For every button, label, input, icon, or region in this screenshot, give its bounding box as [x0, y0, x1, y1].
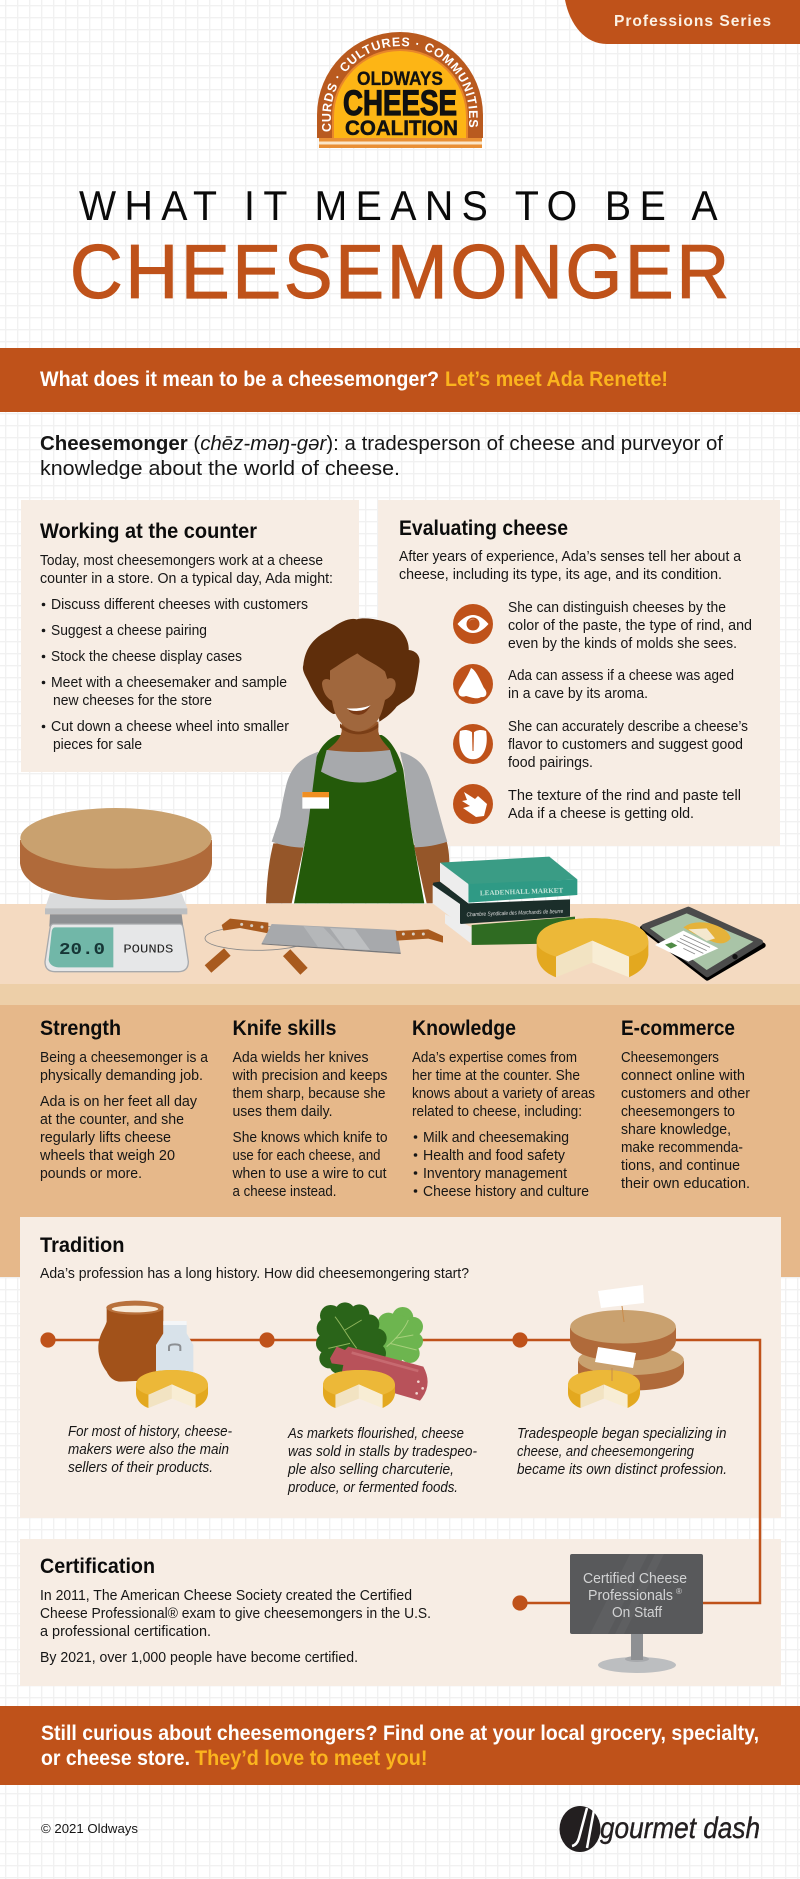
column: e-commerce: cheesemongers to [621, 1104, 735, 1120]
logo: Oldways Cheese Coalition: CURDS · CULTURES · COMMUNITIES [322, 37, 478, 132]
illustration: cut cheese wheel [537, 918, 648, 977]
banner: meet Ada: Let’s meet Ada Renette! [445, 368, 668, 391]
timeline connector [40, 1332, 760, 1611]
panel: working at the counter: Meet with a cheesemaker and sample [51, 675, 287, 691]
sense text: sight: color of the paste, the type of rind, and [508, 618, 752, 634]
panel: evaluating cheese: Evaluating cheese [399, 517, 568, 540]
title [70, 182, 732, 315]
book: green [445, 914, 575, 945]
sense text: taste: She can accurately describe a cheese’s [508, 719, 748, 735]
column: knowledge: Ada’s expertise comes from [412, 1050, 577, 1066]
panel: working at the counter: Working at the counter [40, 520, 257, 543]
caption: history step 2: was sold in stalls by tradespeo- [288, 1444, 477, 1460]
column: strength: regularly lifts cheese [40, 1130, 171, 1146]
column: knife skills: with precision and keeps [232, 1068, 388, 1084]
panel: certification: In 2011, The American Cheese Society created the Certified [40, 1588, 412, 1604]
panel: certification [20, 1539, 781, 1686]
banner: call to action: Still curious about cheesemongers? Find one at your local grocery, specialty, [41, 1722, 759, 1745]
illustration: certified cheese professionals sign: On Staff [612, 1605, 663, 1621]
column: strength: Being a cheesemonger is a [40, 1050, 209, 1066]
column: strength: pounds or more. [40, 1166, 142, 1182]
illustration: greens, salami and cheese [316, 1302, 428, 1408]
panel: evaluating cheese [378, 500, 780, 846]
column: strength: physically demanding job. [40, 1068, 203, 1084]
column: knife skills: a cheese instead. [232, 1184, 336, 1200]
logo: gourmet dash: gourmet dash [600, 1812, 760, 1845]
caption: history step 2 [287, 1426, 477, 1496]
column: knife skills: use for each cheese, and [232, 1148, 380, 1164]
sense text: sight: She can distinguish cheeses by the [508, 600, 726, 616]
definition [40, 433, 723, 480]
illustration: scale with cheese wheel [20, 808, 212, 972]
column: knowledge: related to cheese, including: [412, 1104, 582, 1120]
column: knife skills: when to use a wire to cut [232, 1166, 386, 1182]
caption: history step 3 [517, 1426, 727, 1478]
column: e-commerce: tions, and continue [621, 1158, 740, 1174]
column: knowledge: her time at the counter. She [412, 1068, 580, 1084]
column: knowledge: Cheese history and culture [423, 1184, 589, 1200]
panel: working at the counter: pieces for sale [53, 737, 142, 753]
sense text: sight [508, 600, 752, 652]
column: strength: Strength [40, 1017, 121, 1040]
book: Chambre Syndicale: Chambre Syndicale des Marchands de beurre [467, 909, 563, 918]
caption: history step 3: became its own distinct profession. [517, 1462, 727, 1478]
icon: nose [453, 664, 493, 704]
caption: history step 1: For most of history, cheese- [68, 1424, 232, 1440]
book: Chambre Syndicale [433, 882, 570, 924]
panel: working at the counter: Stock the cheese display cases [51, 649, 242, 665]
icon: touching hand [453, 784, 493, 824]
icon: eye [453, 604, 493, 644]
salami [330, 1347, 428, 1401]
sense text: touch [508, 788, 741, 822]
column: e-commerce: Cheesemongers [621, 1050, 719, 1066]
sense text: smell: in a cave by its aroma. [508, 686, 648, 702]
column: e-commerce: connect online with [621, 1068, 745, 1084]
banner: meet Ada: What does it mean to be a cheesemonger? [40, 368, 439, 391]
illustration: certified cheese professionals sign: Professionals [588, 1588, 673, 1604]
panel: working at the counter: Today, most cheesemongers work at a cheese [40, 553, 323, 569]
column: knife skills: them sharp, because she [232, 1086, 386, 1102]
panel: certification: Cheese Professional® exam to give cheesemongers in the U.S. [40, 1606, 431, 1622]
logo: Oldways Cheese Coalition: OLDWAYS [357, 69, 443, 90]
panel: skills band [0, 1005, 800, 1277]
column: knife skills [232, 1017, 388, 1200]
column: knowledge: Inventory management [423, 1166, 567, 1182]
illustration: certified cheese professionals sign [570, 1554, 703, 1673]
illustration: stack of books [433, 857, 577, 945]
kale [316, 1302, 387, 1374]
caption: history step 2: ple also selling charcuterie, [287, 1462, 454, 1478]
column: e-commerce: customers and other [621, 1086, 750, 1102]
panel: tradition: Tradition [40, 1234, 124, 1257]
illustration: certified cheese professionals sign: ® [676, 1587, 682, 1596]
panel: evaluating cheese: After years of experience, Ada’s senses tell her about a [399, 549, 742, 565]
column: knowledge [412, 1017, 595, 1200]
definition: Cheesemonger (chēz-məŋ-gər): a tradesperson of cheese and purveyor of [40, 433, 723, 455]
definition: knowledge about the world of cheese. [40, 458, 400, 480]
column: knife skills: uses them daily. [232, 1104, 332, 1120]
column: knife skills: Knife skills [232, 1017, 336, 1040]
sense text: touch: The texture of the rind and paste tell [508, 788, 741, 804]
caption: history step 1 [68, 1424, 232, 1476]
sense text: taste [508, 719, 748, 771]
column: strength: Ada is on her feet all day [40, 1094, 198, 1110]
panel: certification: By 2021, over 1,000 people have become certified. [40, 1650, 358, 1666]
column: e-commerce: E-commerce [621, 1017, 735, 1040]
column: e-commerce [621, 1017, 750, 1192]
column: strength [39, 1017, 209, 1182]
panel: working at the counter: new cheeses for the store [53, 693, 212, 709]
column: e-commerce: their own education. [621, 1176, 750, 1192]
panel: certification: a professional certification. [40, 1624, 211, 1640]
illustration: jug, milk and cheese [98, 1301, 208, 1408]
column: e-commerce: make recommenda- [621, 1140, 743, 1156]
logo: gourmet dash [560, 1806, 760, 1852]
panel: working at the counter: Discuss different cheeses with customers [51, 597, 308, 613]
caption: history step 1: sellers of their products. [68, 1460, 213, 1476]
copyright: © 2021 Oldways [41, 1821, 138, 1836]
sense text: smell [508, 668, 734, 702]
logo: Oldways Cheese Coalition: CHEESE [343, 84, 457, 123]
title: WHAT IT MEANS TO BE A [79, 182, 726, 229]
column: knowledge: Knowledge [412, 1017, 516, 1040]
banner: call to action [0, 1706, 800, 1785]
caption: history step 3: cheese, and cheesemongering [517, 1444, 694, 1460]
column: knife skills: Ada wields her knives [232, 1050, 368, 1066]
title: CHEESEMONGER [70, 230, 732, 315]
illustration: Ada the cheesemonger [266, 618, 450, 903]
panel: working at the counter: counter in a store. On a typical day, Ada might: [40, 571, 333, 587]
banner: meet Ada [0, 348, 800, 412]
illustration: scale with cheese wheel: 20.0 [59, 941, 105, 960]
illustration: labelled cheese wheels [568, 1285, 684, 1408]
sense text: touch: Ada if a cheese is getting old. [508, 806, 694, 822]
sense text: taste: food pairings. [508, 755, 593, 771]
sense text: sight: even by the kinds of molds she sees. [508, 636, 737, 652]
sense text: taste: flavor to customers and suggest good [508, 737, 743, 753]
series tab [565, 0, 800, 44]
illustration: certified cheese professionals sign: Certified Cheese [583, 1571, 687, 1587]
column: strength: wheels that weigh 20 [39, 1148, 175, 1164]
caption: history step 1: makers were also the main [68, 1442, 229, 1458]
panel: certification: Certification [40, 1555, 155, 1578]
banner: call to action: They’d love to meet you! [195, 1747, 428, 1770]
column: knife skills: She knows which knife to [232, 1130, 388, 1146]
lettuce [369, 1307, 423, 1363]
column: knowledge: Health and food safety [423, 1148, 566, 1164]
counter [0, 904, 800, 1005]
illustration: scale with cheese wheel: POUNDS [123, 943, 173, 957]
book: Leadenhall Market: LEADENHALL MARKET [480, 886, 564, 897]
sense text: smell: Ada can assess if a cheese was aged [508, 668, 734, 684]
caption: history step 2: As markets flourished, cheese [287, 1426, 464, 1442]
illustration: tablet [643, 909, 763, 978]
logo: Oldways Cheese Coalition: COALITION [345, 117, 458, 140]
panel: tradition [20, 1217, 781, 1518]
column: e-commerce: share knowledge, [621, 1122, 731, 1138]
illustration: knife and cheese wire [205, 919, 443, 971]
caption: history step 3: Tradespeople began specializing in [517, 1426, 726, 1442]
banner: call to action: or cheese store. [41, 1747, 190, 1770]
panel: working at the counter: Cut down a cheese wheel into smaller [51, 719, 289, 735]
panel: working at the counter: Suggest a cheese pairing [51, 623, 207, 639]
panel: working at the counter [21, 500, 359, 772]
book: Leadenhall Market [440, 857, 577, 903]
column: strength: at the counter, and she [40, 1112, 184, 1128]
caption: history step 2: produce, or fermented foods. [287, 1480, 458, 1496]
column: knowledge: knows about a variety of areas [412, 1086, 595, 1102]
panel: evaluating cheese: cheese, including its type, its age, and its condition. [399, 567, 722, 583]
series tab: Professions Series [614, 13, 772, 30]
icon: tongue [453, 724, 493, 764]
panel: tradition: Ada’s profession has a long history. How did cheesemongering start? [40, 1266, 469, 1282]
column: knowledge: Milk and cheesemaking [423, 1130, 569, 1146]
